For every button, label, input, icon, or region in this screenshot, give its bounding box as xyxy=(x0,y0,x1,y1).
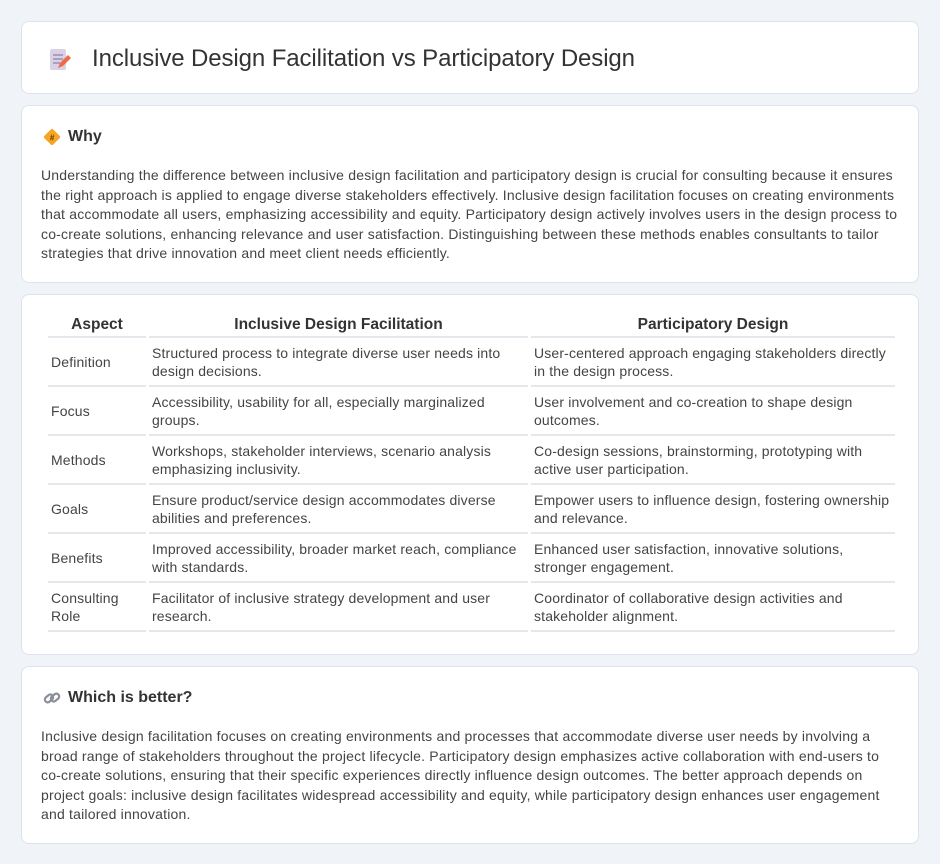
table: Methods xyxy=(51,452,106,468)
icon: link xyxy=(44,692,60,704)
table xyxy=(48,316,895,632)
table: Accessibility, usability for all, especially marginalized groups. xyxy=(152,394,485,428)
text: why: Understanding the difference between inclusive design facilitation and participatory design is crucial for consulting because it ensures the right approach is applied to engage diverse stakeholders effectively. Inclusive design facilitation focuses on creating environments that accommodate all users, emphasizing accessibility and equity. Participatory design actively involves users in the design process to co-create solutions, enhancing relevance and user satisfaction. Distinguishing between these methods enables consultants to tailor strategies that drive innovation and meet client needs efficiently. xyxy=(41,167,897,261)
icon: document with pencil xyxy=(50,49,71,70)
icon: diamond: # xyxy=(50,133,55,142)
table: Co-design sessions, brainstorming, prototyping with active user participation. xyxy=(534,442,862,476)
table: Facilitator of inclusive strategy development and user research. xyxy=(152,590,490,624)
table: Inclusive Design Facilitation xyxy=(234,316,443,333)
table: Workshops, stakeholder interviews, scenario analysis emphasizing inclusivity. xyxy=(152,442,491,476)
table: Definition xyxy=(51,354,111,370)
table: Empower users to influence design, fostering ownership and relevance. xyxy=(534,492,889,526)
table: Focus xyxy=(51,402,90,418)
icon: diamond xyxy=(44,128,60,146)
table: Coordinator of collaborative design activities and stakeholder alignment. xyxy=(534,590,843,624)
text: which is better: Inclusive design facilitation focuses on creating environments and processes that accommodate diverse user needs by involving a broad range of stakeholders throughout the project lifecycle. Participatory design emphasizes active collaboration with end-users to co-create solutions, ensuring that their specific experiences directly influence design outcomes. The better approach depends on project goals: inclusive design facilitates widespread accessibility and equity, while participatory design enhances user engagement and tailored innovation. xyxy=(41,728,880,822)
table: Ensure product/service design accommodates diverse abilities and preferences. xyxy=(152,492,496,526)
table: Enhanced user satisfaction, innovative solutions, stronger engagement. xyxy=(534,540,843,574)
table: Benefits xyxy=(51,550,103,566)
heading: why: Why xyxy=(68,128,102,145)
table: Aspect xyxy=(71,316,123,333)
panel: which is better xyxy=(21,666,919,844)
panel: comparison table xyxy=(21,294,919,655)
panel: why xyxy=(21,105,919,283)
header card xyxy=(21,21,919,94)
table: User involvement and co-creation to shape design outcomes. xyxy=(534,394,852,428)
title: Inclusive Design Facilitation vs Participatory Design xyxy=(92,45,635,72)
heading: which is better: Which is better? xyxy=(68,689,192,706)
table: Goals xyxy=(51,500,88,516)
table: User-centered approach engaging stakeholders directly in the design process. xyxy=(534,344,886,378)
table: Consulting Role xyxy=(51,590,119,624)
table: Participatory Design xyxy=(638,316,788,333)
table: Improved accessibility, broader market reach, compliance with standards. xyxy=(152,540,517,574)
table: Structured process to integrate diverse user needs into design decisions. xyxy=(152,344,500,378)
